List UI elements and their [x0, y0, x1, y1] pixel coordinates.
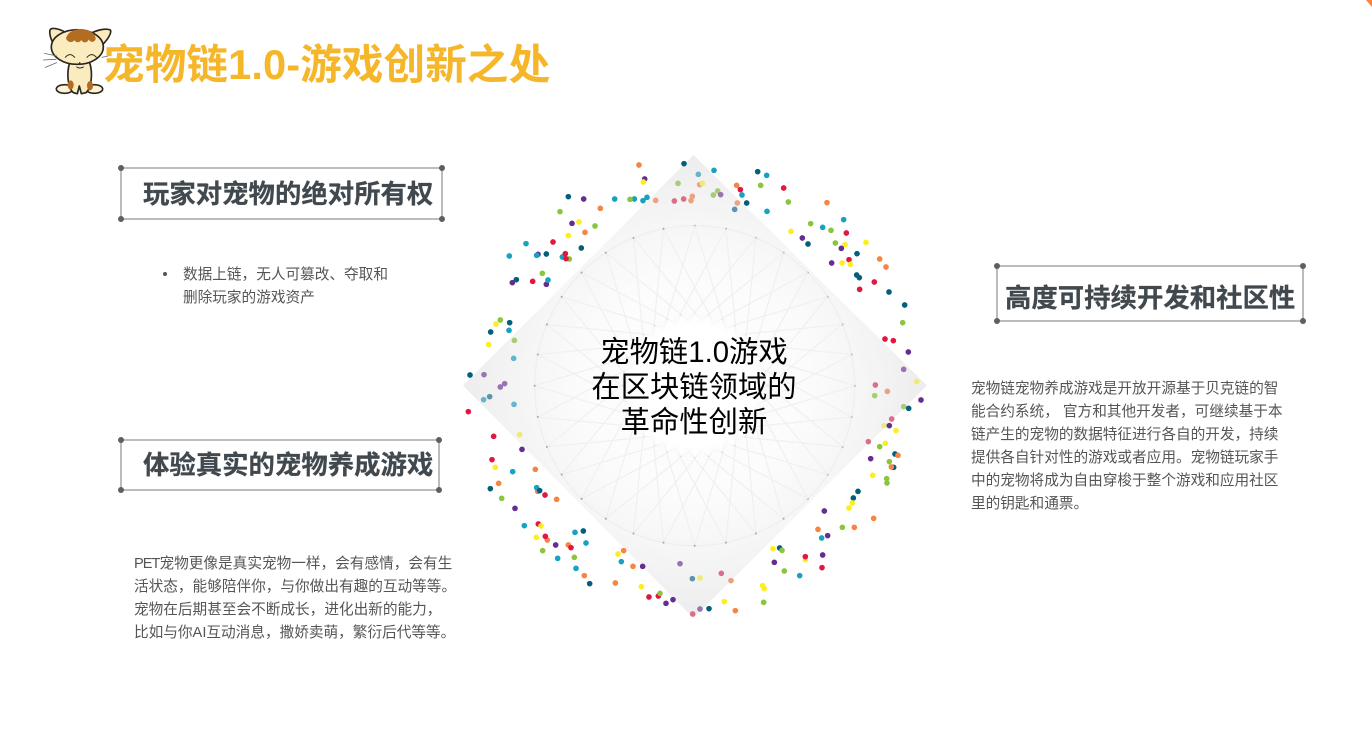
- heading: raising game: 体验真实的宠物养成游戏: [143, 450, 433, 480]
- icon detail: brown fur patches: [66, 29, 96, 90]
- heading box: raising game: [120, 439, 440, 491]
- text: raising game details: 比如与你AI互动消息，撒娇卖萌，繁衍后代等等。: [134, 625, 455, 641]
- text: sustainability details: 中的宠物将成为自由穿梭于整个游戏和应用社区: [971, 473, 1278, 489]
- text: sustainability details: 能合约系统， 官方和其他开发者，可继续基于本: [971, 404, 1283, 420]
- bullet marker: [163, 272, 167, 276]
- icon: cat mascot: [43, 28, 112, 94]
- text: ownership details: [183, 266, 388, 306]
- center statement: [591, 336, 797, 439]
- center statement: 革命性创新: [621, 406, 767, 439]
- text: ownership details: 删除玩家的游戏资产: [183, 290, 315, 306]
- dots: lower left: [468, 397, 680, 603]
- text: raising game details: [134, 555, 456, 641]
- center statement: 在区块链领域的: [591, 371, 797, 404]
- text: sustainability details: [971, 380, 1283, 512]
- dots: upper right: [691, 170, 917, 382]
- text: ownership details: 数据上链，无人可篡改、夺取和: [183, 267, 388, 283]
- text: sustainability details: 提供各自针对性的游戏或者应用。宠物链玩家手: [971, 450, 1278, 466]
- text: sustainability details: 里的钥匙和通票。: [971, 496, 1088, 512]
- dots: lower right: [692, 385, 921, 614]
- text: raising game details: 活状态，能够陪伴你，与你做出有趣的互动等等。: [134, 579, 456, 595]
- heading: ownership: 玩家对宠物的绝对所有权: [143, 179, 433, 209]
- dots: upper left: [470, 164, 684, 387]
- text: sustainability details: 宠物链宠物养成游戏是开放开源基于贝克链的智: [971, 381, 1278, 397]
- center statement: 宠物链1.0游戏: [600, 336, 788, 369]
- title: 宠物链1.0-游戏创新之处: [103, 41, 550, 88]
- diamond background: [463, 155, 927, 618]
- text: raising game details: PET宠物更像是真实宠物一样，会有感情，会有生: [134, 556, 452, 572]
- text: sustainability details: 链产生的宠物的数据特征进行各自的开发，持续: [971, 427, 1278, 443]
- text: raising game details: 宠物在后期甚至会不断成长，进化出新的能力，: [134, 602, 441, 618]
- heading box: ownership: [120, 167, 443, 220]
- icon detail: face: [43, 53, 108, 68]
- corner accent: [1366, 0, 1372, 7]
- mandala pattern: [511, 202, 878, 569]
- heading box: sustainability: [996, 265, 1304, 322]
- heading: sustainability: 高度可持续开发和社区性: [1005, 283, 1295, 313]
